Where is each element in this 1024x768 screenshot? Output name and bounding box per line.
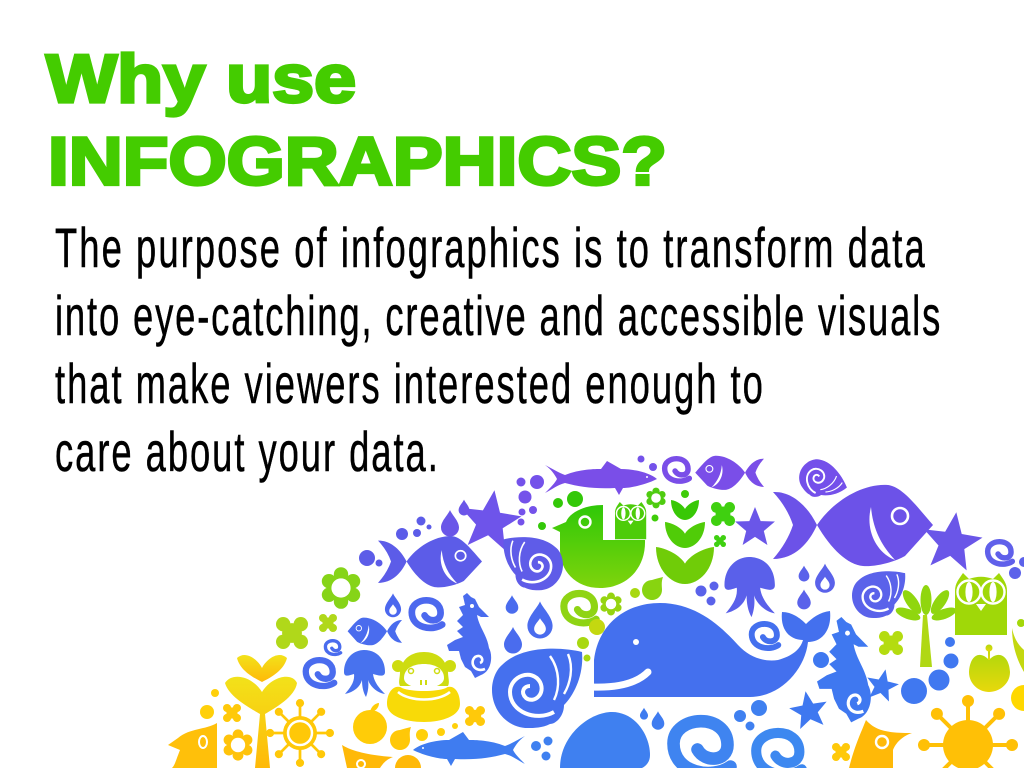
icon: left yellow bird [168,723,217,768]
icon: yellow tree [225,655,297,768]
icon: spiral above whale [752,624,778,648]
icon: green flower [322,567,360,609]
icon: bottom orange bird [342,745,421,768]
icon: bubbles by fish [359,516,432,566]
title line: Why use: Why use [46,41,356,117]
icon: right shell [852,571,905,618]
icon: yellow comma [390,727,411,750]
icon: bubble by sea horse [813,652,829,668]
icon: purple spiral [665,459,689,481]
icon: edge shapes [1011,619,1024,711]
icon: left sun [266,699,334,767]
icon: purple bubbles [516,456,657,526]
body text [55,217,940,484]
title [46,41,667,200]
body line 3: that make viewers interested enough to [55,353,763,416]
icon: bubbles by jellyfish [696,582,718,606]
icon: green crosses [711,502,735,547]
icon: green dots [652,490,689,522]
icon: blue stars [787,666,901,730]
icon: whale [592,603,830,697]
icon: lime comma and flower [589,577,663,635]
icon: lime swirl [564,594,596,623]
icon: green small flower [646,488,666,508]
icon: purple star [456,486,525,552]
icon: green bird [552,505,645,588]
body line 2: into eye-catching, creative and accessible visuals [55,285,940,348]
icon: blue shark [413,732,525,766]
icon: yellow flower [224,729,252,761]
icon: right sun [918,695,1018,768]
icon: green bubbles [538,491,583,530]
body line 1: The purpose of infographics is to transform data [55,217,925,280]
icon: drop with hole [385,593,401,617]
icon: blue spiral [412,600,442,628]
icon: orange bird right [849,720,912,768]
icon: sea horse [447,593,491,678]
body line 4: care about your data. [55,421,438,484]
icon: tulip leaves [656,500,714,584]
icon: palm tree [894,585,958,667]
icon: bottom spiral [756,733,802,768]
icon: lily [969,644,1010,692]
icon: blue drops [504,595,553,654]
icon: large blue shell [492,649,582,728]
icon: monkey [387,652,460,722]
icon: small green owl [615,502,646,539]
icon: blue bubbles [531,700,767,760]
title line: INFOGRAPHICS?: INFOGRAPHICS? [48,124,667,200]
illustration: animal and plant mosaic [168,451,1024,768]
icon: yellow bubbles [200,689,458,741]
icon: bottom blue dome [560,712,650,768]
icon: right spiral and bubbles [988,542,1024,579]
icon: lime dots [577,588,640,662]
icon: large purple fish [773,485,933,566]
icon: medium fish [378,536,482,587]
icon: stars [735,507,985,572]
icon: bubble chain [901,637,958,704]
icon: yellow crosses [223,704,850,761]
icon: purple shark [545,461,657,495]
icon: purple shell [503,537,563,590]
icon: drops by jellyfish [797,564,835,609]
icon: small fish [348,618,402,645]
icon: purple drops [441,500,469,536]
icon: purple jellyfish [724,557,775,617]
icon: apple [353,703,387,744]
icon: top purple fish [695,456,764,490]
icon: jellyfish [344,650,385,697]
icon: drops near bottom [640,708,664,730]
icon: spirals [306,641,341,686]
icon: large owl [955,573,1007,635]
icon: right sea horse [817,617,871,722]
icon: top shell [792,451,848,509]
icon: lime crosses [276,614,337,649]
icon: large spiral [674,721,730,768]
icon: lime cross [879,631,903,655]
